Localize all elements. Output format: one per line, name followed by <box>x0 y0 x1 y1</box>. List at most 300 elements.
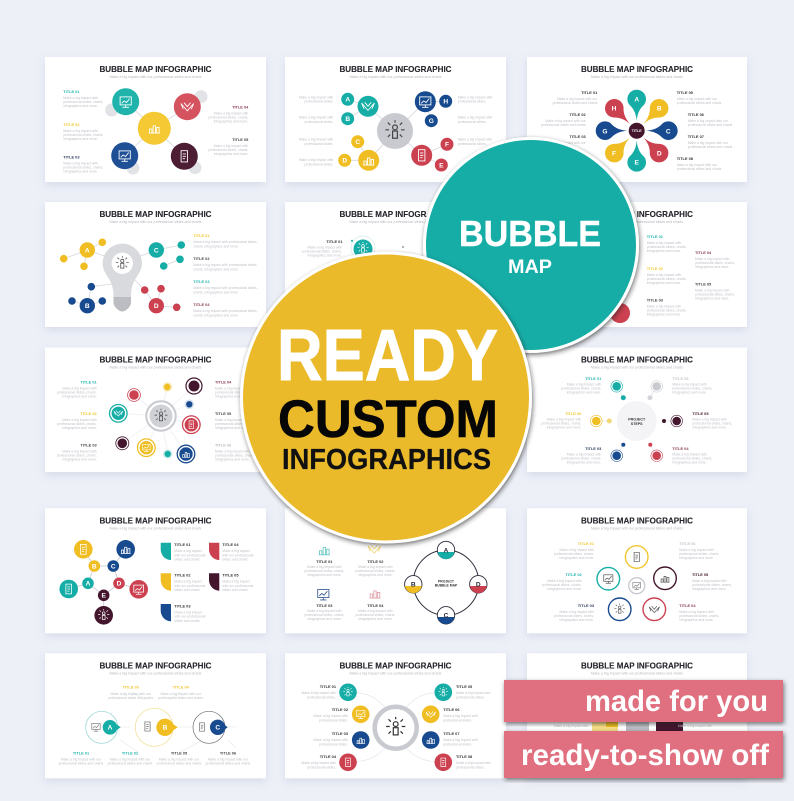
right descriptions: TITLE 06 <box>688 112 705 117</box>
subheading: Make a big impact with our professional slides and charts <box>591 220 683 224</box>
badge subheading: map: MAP <box>508 257 552 278</box>
bottom descriptions: professional slides and charts <box>157 762 202 766</box>
panel: row 2 left slide with light bulb <box>45 202 266 327</box>
left descriptions: TITLE 03 <box>332 731 349 736</box>
descriptions: Make a big impact with professional slides, <box>193 263 258 267</box>
descriptions: Make a big impact with professional slides, <box>193 240 258 244</box>
descriptions: infographics and more. <box>647 249 681 253</box>
left descriptions: professional slides, charts, <box>542 583 582 587</box>
bottom descriptions: Make a big impact with our <box>159 758 200 762</box>
left descriptions <box>541 376 602 464</box>
right descriptions: TITLE 04 <box>672 446 689 451</box>
descriptions column 1: Make a big impact <box>174 549 202 553</box>
bubble map with lettered nodes <box>338 91 454 172</box>
left descriptions: professional slides, charts, <box>554 614 594 618</box>
bottom descriptions: Make a big impact with our <box>208 758 249 762</box>
right descriptions: infographics and more. <box>679 556 714 560</box>
badge heading: bubble: BUBBLE <box>459 213 601 254</box>
top descriptions: Make a big impact with our <box>161 692 202 696</box>
left descriptions: professional slides, charts, <box>541 422 581 426</box>
description <box>302 239 343 258</box>
right descriptions: TITLE 08 <box>677 156 694 161</box>
left descriptions: infographics and more. <box>567 390 601 394</box>
right descriptions: Make a big impact with our <box>677 163 718 167</box>
top descriptions: TITLE 03 <box>123 685 140 690</box>
right descriptions: TITLE 05 <box>677 90 694 95</box>
descriptions: Make a big impact with professional slides, <box>193 286 258 290</box>
left descriptions: Make a big impact with <box>62 418 97 422</box>
left descriptions: professional slides, charts, <box>57 390 97 394</box>
panel: row 2 right slide <box>527 202 747 327</box>
bottom descriptions: TITLE 05 <box>171 750 188 755</box>
descriptions column 2: Make a big impact <box>222 549 250 553</box>
left descriptions: Make a big impact with <box>547 418 581 422</box>
project bubble map ring <box>405 541 487 624</box>
descriptions: professional slides, charts, <box>304 613 344 617</box>
text block: title 01 <box>63 89 103 108</box>
right descriptions: professional slides. <box>458 100 487 104</box>
descriptions: Make a big impact with <box>307 565 342 569</box>
right descriptions: TITLE 05 <box>692 572 709 577</box>
descriptions column 1 <box>174 542 206 623</box>
text block: title 02: professional slides, charts, <box>63 133 103 137</box>
heading: BUBBLE MAP INFOGRAPHIC <box>340 209 452 219</box>
left descriptions: Make a big impact with <box>62 386 97 390</box>
descriptions: TITLE 04 <box>695 250 712 255</box>
lettered outline bubbles <box>86 692 236 752</box>
descriptions column 1: slides and charts <box>174 588 200 592</box>
badge: bubble map teal circle <box>423 137 639 353</box>
descriptions: TITLE 04 <box>193 302 210 307</box>
descriptions column 1: with our professional <box>174 553 206 557</box>
right descriptions: TITLE 07 <box>443 731 460 736</box>
left descriptions: professional slides, charts, <box>57 422 97 426</box>
right descriptions: TITLE 08 <box>456 754 473 759</box>
banner: ready-to-show off: ready-to-show off <box>521 739 770 772</box>
descriptions column 1: TITLE 03 <box>174 603 191 608</box>
light bulb bubble map: C <box>154 247 159 254</box>
project steps diagram <box>590 380 682 462</box>
light bulb bubble map: D <box>154 303 159 310</box>
text block: title 03: professional slides, charts, <box>63 166 103 170</box>
left descriptions: infographics and more. <box>567 460 601 464</box>
bottom descriptions: professional slides and charts <box>59 762 104 766</box>
left descriptions: TITLE 02 <box>332 707 349 712</box>
project steps diagram: STEPS <box>631 422 643 426</box>
right descriptions: infographics and more. <box>692 587 727 591</box>
description: professional slides, charts, <box>302 250 342 254</box>
light bulb bubble map: B <box>85 303 90 310</box>
left descriptions: Make a big impact with <box>299 158 333 162</box>
right descriptions: professional slides, charts, <box>692 422 732 426</box>
text block: title 01: TITLE 01 <box>63 89 80 94</box>
right descriptions: professional slides. <box>458 142 487 146</box>
top descriptions: professional slides and charts <box>158 696 203 700</box>
left descriptions: Make a big impact with our <box>545 141 587 145</box>
text block: title 03 <box>63 154 103 174</box>
bottom descriptions <box>59 750 251 766</box>
left descriptions: Make a big impact with <box>302 691 336 695</box>
panel: row 4 left slide <box>45 508 266 633</box>
left descriptions: TITLE 01 <box>585 376 602 381</box>
right descriptions: Make a big impact with <box>672 452 707 456</box>
text block: title 04: infographics and more. <box>214 120 248 124</box>
left descriptions: professional slides. <box>319 718 348 722</box>
heading: BUBBLE MAP INFOGRAPHIC <box>100 64 212 74</box>
left descriptions: Make a big impact with <box>299 138 333 142</box>
heading: BUBBLE MAP INFOGRAPHIC <box>581 660 693 670</box>
teardrop petal diagram: TITLE <box>632 129 642 133</box>
right descriptions: Make a big impact with <box>215 418 250 422</box>
left descriptions: infographics and more. <box>560 618 594 622</box>
left descriptions: infographics and more. <box>547 587 582 591</box>
descriptions: infographics and more. <box>647 281 681 285</box>
descriptions: Make a big impact with <box>307 609 342 613</box>
heading: BUBBLE MAP INFOGRAPHIC <box>581 64 693 74</box>
light bulb bubble map: A <box>85 247 90 254</box>
text block: title 01: professional slides, charts, <box>63 100 103 104</box>
bubble map with lettered nodes: A <box>345 97 350 104</box>
left descriptions: TITLE 01 <box>581 90 598 95</box>
right descriptions: professional slides, charts, <box>215 422 255 426</box>
descriptions column 1: Make a big impact <box>174 610 202 614</box>
left descriptions: professional slides, charts, <box>554 552 594 556</box>
left descriptions: Make a big impact with <box>62 449 97 453</box>
strip of shapes between banners: TITLE 03 <box>563 718 580 723</box>
badge: ready custom infographics gold circle <box>240 252 532 544</box>
descriptions: Make a big impact with <box>647 305 681 309</box>
subheading: Make a big impact with our professional slides and charts <box>350 75 442 79</box>
text block: title 02: Make a big impact with <box>63 129 98 133</box>
badge heading: infographics: INFOGRAPHICS <box>282 444 491 476</box>
subheading: Make a big impact with our professional slides and charts <box>110 526 202 530</box>
panel: row 3 left slide <box>45 348 266 472</box>
descriptions: infographics and more. <box>307 617 342 621</box>
coloured tabs <box>161 543 219 621</box>
left descriptions: TITLE 01 <box>320 684 337 689</box>
left descriptions: TITLE 04 <box>320 754 337 759</box>
descriptions: TITLE 03 <box>193 279 210 284</box>
left descriptions <box>541 90 598 145</box>
right descriptions: Make a big impact with <box>458 138 492 142</box>
right descriptions: Make a big impact with <box>679 548 714 552</box>
bubble map with lettered nodes: C <box>355 139 360 146</box>
descriptions: TITLE 01 <box>193 233 210 238</box>
teardrop petal diagram: C <box>666 128 671 135</box>
strip of shapes between banners: Make a big impact with <box>678 724 712 728</box>
left descriptions: TITLE 02 <box>565 411 582 416</box>
right descriptions: Make a big impact with <box>672 382 707 386</box>
heading: BUBBLE MAP INFOGRAPHIC <box>100 354 212 364</box>
descriptions: TITLE 05 <box>695 282 712 286</box>
right descriptions <box>443 684 491 770</box>
left descriptions: infographics and more. <box>547 426 581 430</box>
bubble map with lettered nodes: F <box>445 142 449 149</box>
left descriptions: Make a big impact with <box>547 579 582 583</box>
right descriptions: professional slides, charts, <box>679 614 719 618</box>
bottom descriptions: professional slides and charts <box>206 762 251 766</box>
left descriptions: professional slides, charts, <box>561 386 601 390</box>
left descriptions: professional slides and charts <box>553 101 598 105</box>
descriptions: professional slides, charts, <box>304 569 344 573</box>
right descriptions: TITLE 05 <box>215 411 232 416</box>
descriptions <box>304 559 395 621</box>
right descriptions: Make a big impact with our <box>677 97 718 101</box>
pentagon bubble map: C <box>111 563 116 570</box>
right descriptions <box>458 95 492 146</box>
panel: row 3 middle slide <box>285 348 506 472</box>
right descriptions: infographics and more. <box>672 390 707 394</box>
line icons <box>318 545 381 600</box>
ring bubbles <box>597 546 676 621</box>
right descriptions: TITLE 04 <box>215 380 232 385</box>
left descriptions: professional slides. <box>304 162 333 166</box>
pentagon bubble map <box>59 540 148 625</box>
descriptions: professional slides, charts, <box>355 613 395 617</box>
text block: title 05: TITLE 05 <box>232 137 249 142</box>
concentric bubble map <box>110 378 202 463</box>
top descriptions: Make a big impact with our <box>111 692 152 696</box>
right descriptions: professional slides. <box>443 742 472 746</box>
right descriptions: Make a big impact with <box>458 95 492 99</box>
left descriptions: Make a big impact with <box>299 95 333 99</box>
heading: BUBBLE MAP INFOGRAPHIC <box>100 209 212 219</box>
left descriptions: Make a big impact with <box>560 548 594 552</box>
right descriptions <box>677 90 733 171</box>
panel: row 1 left slide <box>45 57 266 182</box>
descriptions column 2: slides and charts <box>222 558 248 562</box>
descriptions: Make a big impact with <box>647 241 681 245</box>
panel: row 5 middle slide <box>285 653 506 778</box>
right descriptions: TITLE 07 <box>688 134 704 139</box>
left descriptions: TITLE 03 <box>578 603 595 608</box>
descriptions: professional slides, charts, <box>647 309 687 313</box>
left descriptions: Make a big impact with <box>567 382 601 386</box>
right descriptions: TITLE 06 <box>672 376 689 381</box>
right descriptions: Make a big impact with <box>443 738 478 742</box>
descriptions: charts, infographics and more <box>193 314 238 318</box>
left descriptions: Make a big impact with <box>314 738 348 742</box>
pentagon bubble map: E <box>101 593 106 600</box>
descriptions: TITLE 03 <box>316 603 333 608</box>
left descriptions: Make a big impact with <box>299 116 333 120</box>
text block: title 03: Make a big impact with <box>63 162 98 166</box>
teardrop petal diagram: E <box>634 160 639 167</box>
left descriptions <box>302 684 349 770</box>
subheading: Make a big impact with our professional slides and charts <box>350 672 442 676</box>
panel: row 4 middle slide <box>285 508 506 633</box>
right descriptions: professional slides. <box>456 766 485 770</box>
light bulb bubble map <box>60 238 185 313</box>
left descriptions: TITLE 01 <box>578 541 595 546</box>
right descriptions: infographics and more. <box>215 394 250 398</box>
project steps diagram: PROJECT <box>628 418 646 422</box>
lettered outline bubbles: C <box>215 725 220 732</box>
right descriptions: TITLE 06 <box>215 442 232 447</box>
description: infographics and more. <box>308 254 342 258</box>
bottom descriptions: TITLE 06 <box>220 750 237 755</box>
bubble map <box>105 88 208 174</box>
left descriptions: TITLE 02 <box>569 112 587 117</box>
descriptions column 2: with our professional <box>222 584 254 588</box>
teardrop petal diagram: B <box>657 106 662 112</box>
heading: BUBBLE MAP INFOGRAPHIC <box>340 660 452 670</box>
descriptions column 2 <box>222 542 254 592</box>
strip of shapes between banners: Make a big impact with <box>554 724 588 728</box>
right descriptions: Make a big impact with <box>456 691 491 695</box>
descriptions: professional slides, charts, <box>695 292 735 296</box>
pentagon bubble map: A <box>86 581 91 588</box>
descriptions: infographics and more. <box>647 313 681 317</box>
project bubble map ring: BUBBLE MAP <box>435 584 458 588</box>
project bubble map ring: C <box>444 613 449 620</box>
left descriptions: professional slides. <box>304 120 333 124</box>
left descriptions: Make a big impact with <box>314 714 348 718</box>
descriptions: charts, infographics and more <box>193 244 238 248</box>
heading: BUBBLE MAP INFOGRAPHIC <box>340 354 452 364</box>
right descriptions: professional slides and charts <box>688 145 733 149</box>
right descriptions: professional slides. <box>443 718 472 722</box>
panel: row 1 middle slide <box>285 57 506 182</box>
panel: row 5 left slide <box>45 653 266 778</box>
right descriptions: Make a big impact with our <box>688 119 729 123</box>
text block: title 03: TITLE 03 <box>63 154 80 160</box>
teardrop petal diagram: F <box>612 151 616 158</box>
left descriptions: infographics and more. <box>560 556 594 560</box>
right descriptions: professional slides, charts, <box>692 583 732 587</box>
subheading: Make a big impact with our professional slides and charts <box>591 672 683 676</box>
right descriptions: Make a big impact with our <box>688 141 729 145</box>
descriptions column 2: Make a big impact <box>222 580 250 584</box>
subheading: Make a big impact with our professional slides and charts <box>110 366 202 370</box>
subheading: Make a big impact with our professional slides and charts <box>591 75 683 79</box>
descriptions column 2: TITLE 05 <box>222 573 239 578</box>
descriptions column 1: Make a big impact <box>174 580 202 584</box>
descriptions column 1: with our professional <box>174 615 206 619</box>
right descriptions: TITLE 06 <box>443 707 460 712</box>
text block: title 02 <box>63 122 103 141</box>
right descriptions: TITLE 05 <box>692 411 709 416</box>
descriptions: TITLE 01 <box>316 559 333 564</box>
descriptions: infographics and more. <box>358 573 393 577</box>
right descriptions <box>215 380 255 461</box>
right descriptions: professional slides and charts <box>677 167 722 171</box>
right descriptions: Make a big impact with <box>215 449 250 453</box>
descriptions: infographics and more. <box>358 617 393 621</box>
bottom descriptions: TITLE 01 <box>73 750 90 755</box>
description: Make a big impact with <box>308 246 342 250</box>
left descriptions: professional slides and charts <box>541 123 586 127</box>
partial bubble <box>351 236 404 260</box>
right descriptions: professional slides, charts, <box>672 386 712 390</box>
banner: made for you: made for you <box>585 685 768 718</box>
project bubble map ring: A <box>444 547 449 554</box>
text block: title 01: infographics and more. <box>63 104 98 108</box>
heading: BUBBLE MAP INFOGRAPHIC <box>100 660 212 670</box>
right descriptions: infographics and more. <box>215 426 250 430</box>
left descriptions <box>542 541 595 622</box>
right descriptions: professional slides and charts <box>677 101 722 105</box>
text block: title 04: professional slides, charts, <box>208 116 248 120</box>
descriptions column 1: with our professional <box>174 584 206 588</box>
descriptions: professional slides, charts, <box>695 261 735 265</box>
right descriptions: professional slides, charts, <box>672 456 712 460</box>
text block: title 03: infographics and more. <box>63 170 98 174</box>
subheading: Make a big impact with our professional slides and charts <box>110 75 202 79</box>
descriptions: Make a big impact with <box>358 609 393 613</box>
right descriptions: professional slides. <box>458 120 487 124</box>
right descriptions: infographics and more. <box>679 618 714 622</box>
left descriptions <box>57 380 98 461</box>
pentagon bubble map: B <box>92 563 97 570</box>
lettered outline bubbles: B <box>163 725 168 732</box>
right descriptions: infographics and more. <box>692 426 727 430</box>
top descriptions <box>108 685 203 700</box>
bubble map with lettered nodes: E <box>439 162 444 169</box>
bubble map with lettered nodes: H <box>443 99 448 106</box>
right descriptions: Make a big impact with <box>443 714 478 718</box>
left descriptions: TITLE 03 <box>80 442 98 447</box>
descriptions column 1: slides and charts <box>174 558 200 562</box>
right descriptions: infographics and more. <box>215 457 250 461</box>
strip of shapes between banners: TITLE 06 <box>687 718 704 723</box>
descriptions column 2: slides and charts <box>222 588 248 592</box>
descriptions column 1: TITLE 01 <box>174 542 191 547</box>
text block: title 05: professional slides, charts, <box>208 148 248 152</box>
text block: title 05: Make a big impact with <box>214 144 248 148</box>
right descriptions: professional slides, charts, <box>215 390 255 394</box>
right descriptions: Make a big impact with <box>215 386 250 390</box>
teardrop petal diagram: A <box>634 96 639 103</box>
pentagon bubble map: D <box>117 581 122 588</box>
left descriptions: TITLE 02 <box>565 572 583 577</box>
right descriptions: TITLE 06 <box>679 541 696 546</box>
left descriptions: professional slides, charts, <box>561 456 601 460</box>
descriptions column 2: with our professional <box>222 553 254 557</box>
right descriptions: Make a big impact with <box>458 116 492 120</box>
lettered outline bubbles: A <box>108 725 113 732</box>
hub diagram <box>339 684 452 771</box>
bottom descriptions: Make a big impact with our <box>61 758 102 762</box>
descriptions: Make a big impact with <box>695 288 730 292</box>
left descriptions: professional slides, charts, <box>57 453 97 457</box>
bottom descriptions: TITLE 02 <box>122 750 139 755</box>
left descriptions: TITLE 01 <box>80 380 98 385</box>
subheading: Make a big impact with our professional slides and charts <box>591 366 683 370</box>
teardrop petal diagram: G <box>602 128 608 135</box>
banner: made for you <box>504 680 783 722</box>
descriptions: Make a big impact with <box>358 565 393 569</box>
left descriptions: TITLE 03 <box>585 446 602 451</box>
descriptions <box>647 234 735 317</box>
text block: title 02: TITLE 02 <box>63 122 80 127</box>
left descriptions: professional slides. <box>307 766 336 770</box>
left descriptions: professional slides. <box>319 742 348 746</box>
heading: BUBBLE MAP INFOGRAPHIC <box>100 516 212 526</box>
right descriptions: professional slides and charts <box>688 123 733 127</box>
descriptions: professional slides, charts, <box>647 245 687 249</box>
bottom descriptions: professional slides and charts <box>108 762 153 766</box>
descriptions column 2: TITLE 04 <box>222 542 239 547</box>
subheading: Make a big impact with our professional slides and charts <box>110 220 202 224</box>
descriptions: professional slides, charts, <box>355 569 395 573</box>
bubble map with lettered nodes: G <box>429 118 434 125</box>
text block: title 04: TITLE 04 <box>232 104 249 110</box>
descriptions <box>193 233 258 318</box>
right descriptions <box>672 376 732 464</box>
subheading: Make a big impact with our professional slides and charts <box>591 526 683 530</box>
right descriptions: professional slides. <box>456 696 485 700</box>
